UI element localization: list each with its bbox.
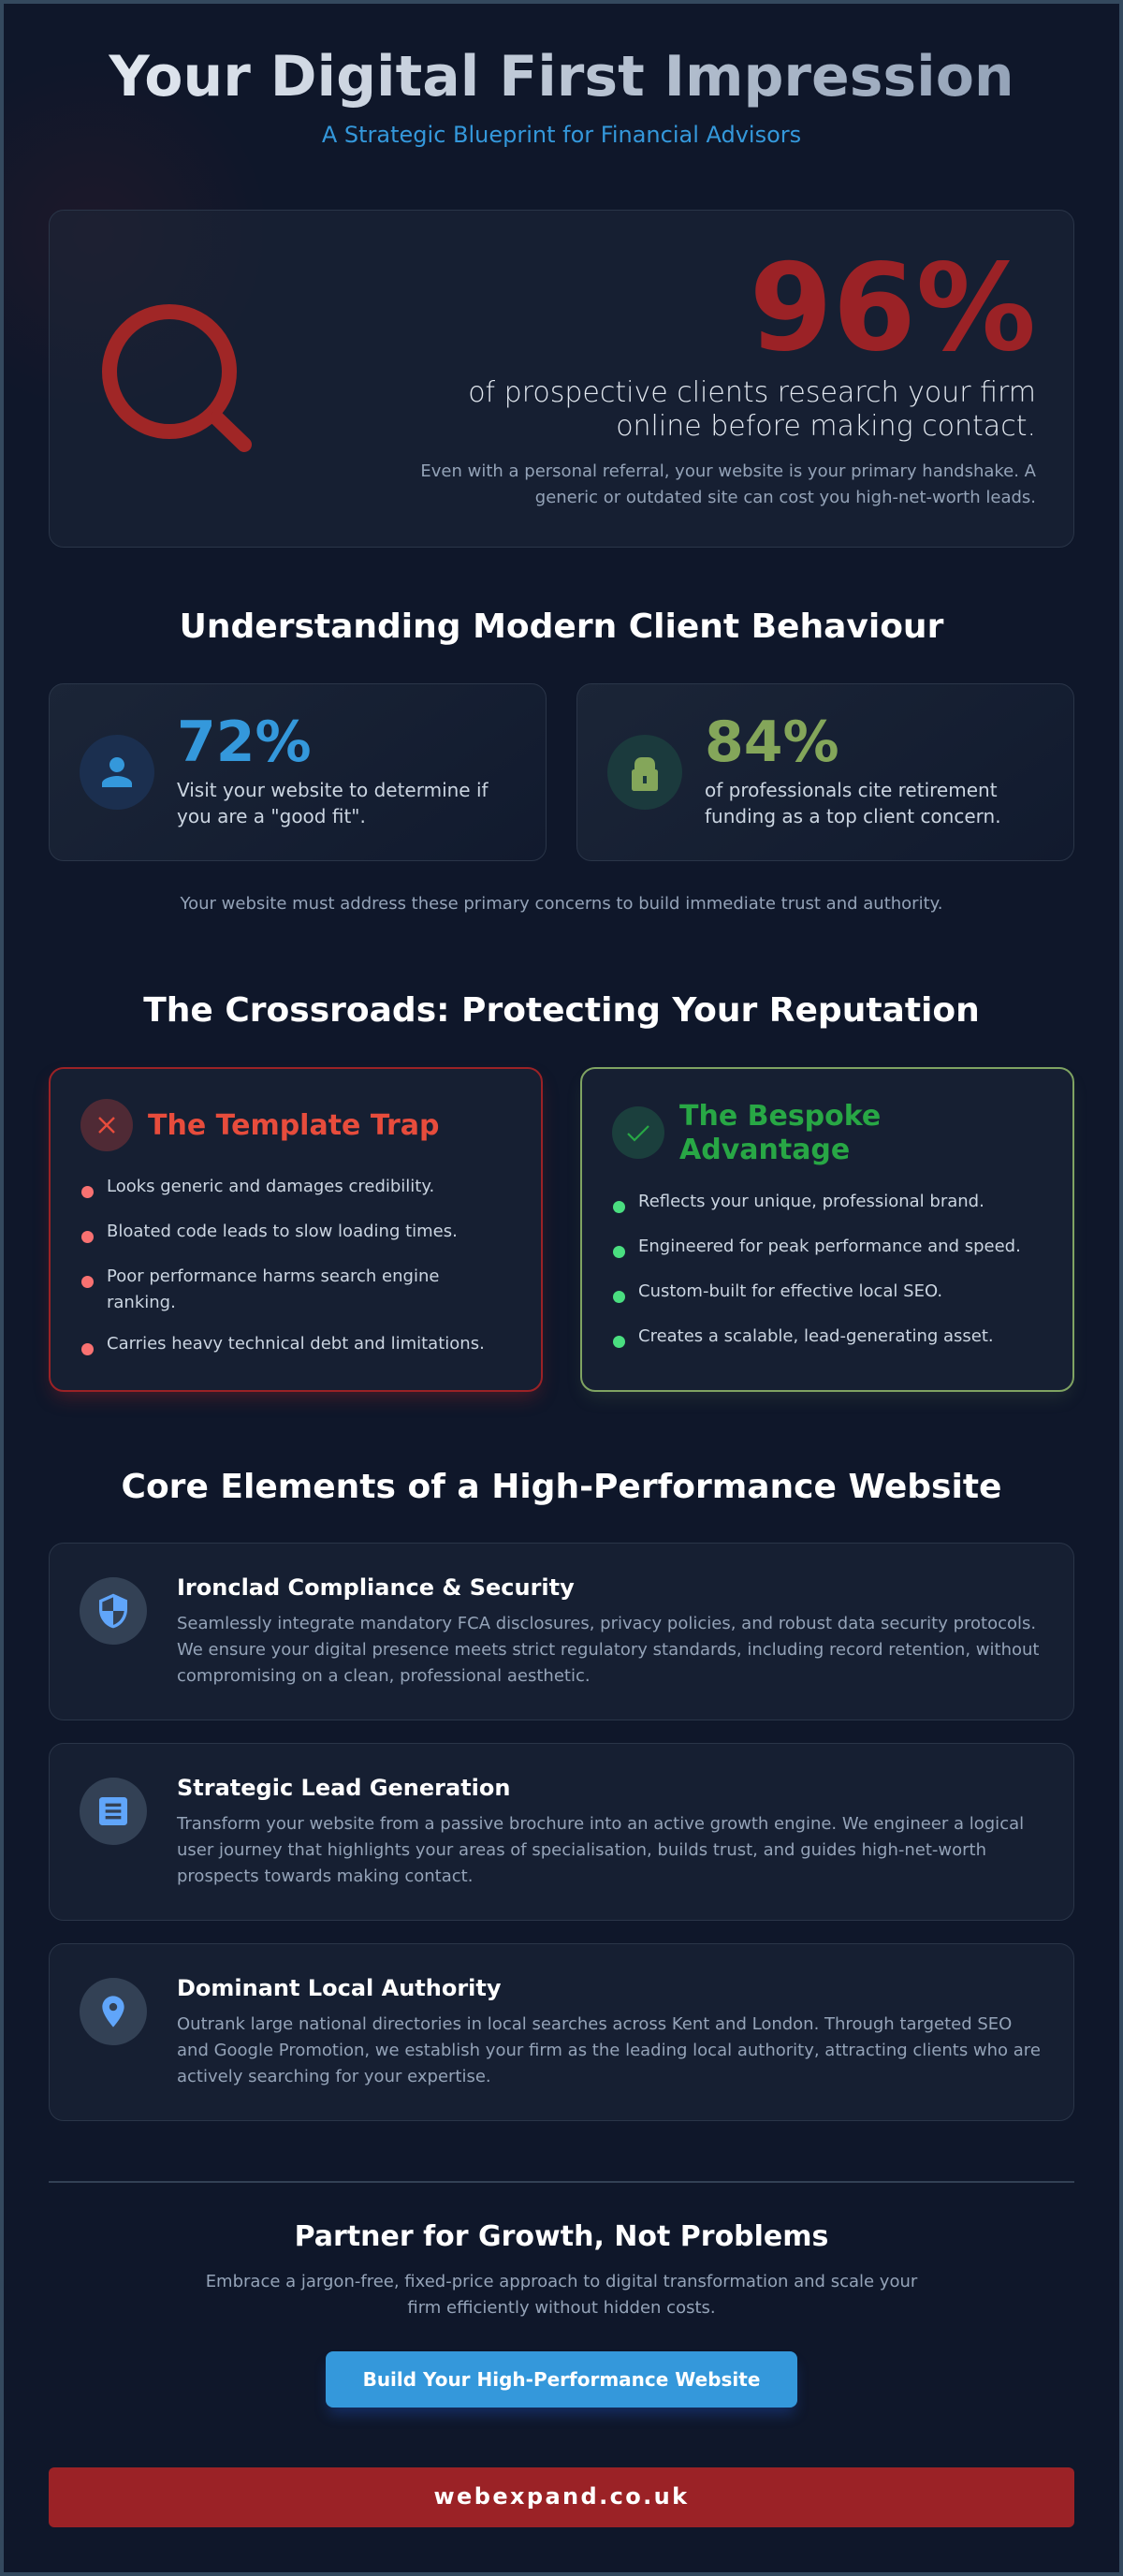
- lead generation heading: Strategic Lead Generation: [177, 1775, 510, 1801]
- stat number 84%: 84%: [705, 710, 839, 775]
- icon: person: [80, 735, 154, 810]
- panel: the template trap: Looks generic and damages credibility.: [107, 1177, 434, 1196]
- closing heading: Partner for Growth, Not Problems: [295, 2220, 828, 2253]
- panel: the template trap: Bloated code leads to slow loading times.: [107, 1222, 458, 1241]
- heading: core elements: Core Elements of a High-Performance Website: [122, 1468, 1001, 1506]
- hero description: [420, 461, 1036, 507]
- bespoke heading: The Bespoke: [679, 1100, 881, 1133]
- closing text: firm efficiently without hidden costs.: [407, 2298, 716, 2318]
- stat text 84%: [705, 779, 1001, 827]
- icon: magnifying glass: [102, 304, 252, 452]
- bespoke heading: [679, 1100, 881, 1166]
- call to action button: [326, 2351, 797, 2408]
- local authority text: Outrank large national directories in local searches across Kent and London. Through targeted SEO: [177, 2014, 1012, 2034]
- panel: hero statistic: [49, 210, 1074, 548]
- compliance heading: Ironclad Compliance & Security: [177, 1574, 575, 1601]
- stat text 72%: Visit your website to determine if: [177, 779, 489, 801]
- icon: document: [80, 1778, 147, 1845]
- hero statement: of prospective clients research your firm: [468, 376, 1036, 409]
- bespoke heading: Advantage: [679, 1134, 850, 1166]
- compliance text: [177, 1614, 1039, 1686]
- stat text 72%: you are a "good fit".: [177, 805, 366, 827]
- compliance text: We ensure your digital presence meets strict regulatory standards, including record retention, without: [177, 1640, 1039, 1660]
- heading: client behaviour: Understanding Modern Client Behaviour: [180, 607, 943, 646]
- icon: cross: [80, 1099, 133, 1151]
- stat text 84%: of professionals cite retirement: [705, 779, 998, 801]
- local authority text: and Google Promotion, we establish your firm as the leading local authority, attracting clients who are: [177, 2041, 1041, 2060]
- lead generation text: user journey that highlights your areas of specialisation, builds trust, and guides high-net-worth: [177, 1840, 986, 1860]
- panel: the template trap: ranking.: [107, 1293, 176, 1312]
- note: Your website must address these primary concerns to build immediate trust and authority.: [181, 894, 942, 914]
- local authority text: actively searching for your expertise.: [177, 2067, 491, 2086]
- icon: location pin: [80, 1978, 147, 2045]
- compliance text: Seamlessly integrate mandatory FCA disclosures, privacy policies, and robust data security protocols.: [177, 1614, 1036, 1633]
- panel: local authority: [49, 1943, 1074, 2121]
- panel: the bespoke advantage: Reflects your unique, professional brand.: [638, 1192, 984, 1211]
- panel: the template trap: [49, 1067, 543, 1392]
- title: Your Digital First Impression: [109, 44, 1014, 110]
- panel: the template trap: Poor performance harms search engine: [107, 1266, 439, 1286]
- hero statement: online before making contact.: [616, 410, 1036, 443]
- bespoke list: [613, 1192, 1021, 1348]
- lead generation text: prospects towards making contact.: [177, 1866, 473, 1886]
- lead generation text: Transform your website from a passive brochure into an active growth engine. We engineer a logical: [177, 1814, 1024, 1834]
- closing text: Embrace a jargon-free, fixed-price approach to digital transformation and scale your: [206, 2272, 917, 2291]
- icon: lock: [607, 735, 682, 810]
- panel: the bespoke advantage: [580, 1067, 1074, 1392]
- hero number: 96%: [750, 239, 1036, 378]
- panel: stat 72%: [49, 683, 547, 861]
- closing text: [206, 2272, 917, 2318]
- panel: the bespoke advantage: Custom-built for effective local SEO.: [638, 1281, 942, 1301]
- local authority heading: Dominant Local Authority: [177, 1975, 502, 2001]
- stat text 72%: [177, 779, 489, 827]
- panel: stat 84%: [576, 683, 1074, 861]
- heading: crossroads: The Crossroads: Protecting Your Reputation: [143, 991, 980, 1030]
- icon: shield: [80, 1577, 147, 1645]
- trap list: [81, 1177, 485, 1355]
- stat number 72%: 72%: [177, 710, 312, 775]
- call to action button: Build Your High-Performance Website: [363, 2368, 760, 2391]
- icon: check: [612, 1106, 664, 1159]
- lead generation text: [176, 1814, 1024, 1886]
- subtitle: A Strategic Blueprint for Financial Advisors: [322, 122, 801, 148]
- hero statement: [468, 376, 1036, 443]
- trap heading: The Template Trap: [148, 1109, 440, 1142]
- panel: the bespoke advantage: Creates a scalable, lead-generating asset.: [638, 1326, 994, 1346]
- panel: the template trap: Carries heavy technical debt and limitations.: [107, 1334, 485, 1354]
- hero description: Even with a personal referral, your website is your primary handshake. A: [420, 461, 1036, 481]
- footer bar: [49, 2467, 1074, 2527]
- stat text 84%: funding as a top client concern.: [705, 805, 1001, 827]
- panel: compliance and security: [49, 1543, 1074, 1720]
- panel: lead generation: [49, 1743, 1074, 1921]
- panel: the bespoke advantage: Engineered for peak performance and speed.: [638, 1237, 1021, 1256]
- footer bar: webexpand.co.uk: [433, 2483, 690, 2510]
- local authority text: [177, 2014, 1041, 2086]
- compliance text: compromising on a clean, professional aesthetic.: [177, 1666, 591, 1686]
- hero description: generic or outdated site can cost you high-net-worth leads.: [535, 488, 1036, 507]
